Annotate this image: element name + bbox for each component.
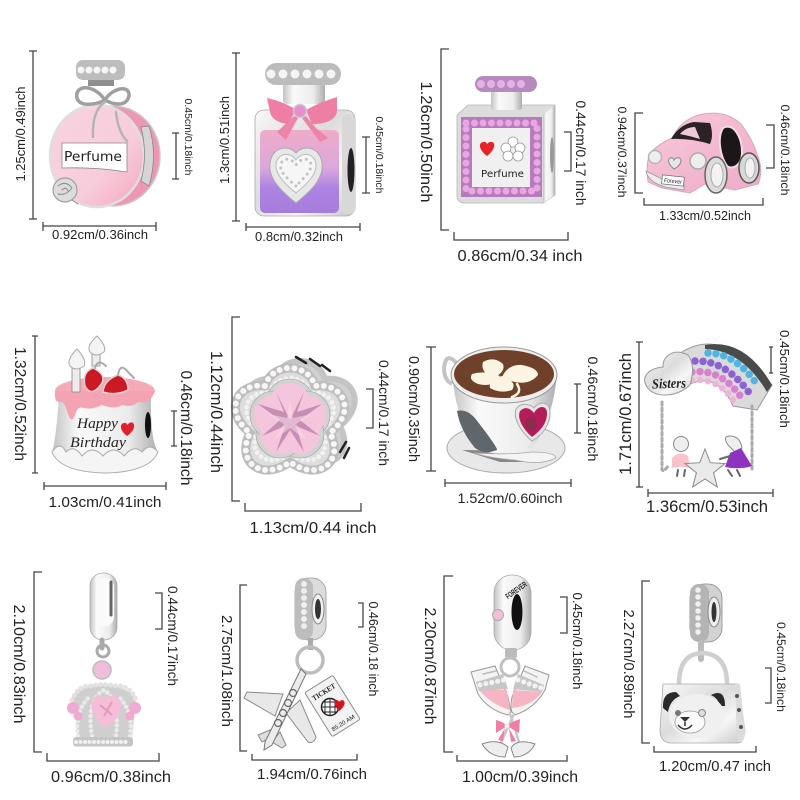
height dimension line xyxy=(29,51,37,219)
width label: 1.52cm/0.60inch xyxy=(458,490,562,506)
hole label: 0.45cm/0.18inch xyxy=(777,330,792,428)
icon: crystal flower xyxy=(235,357,355,470)
icon: toasting glasses pendant xyxy=(471,575,549,757)
width label: 1.33cm/0.52inch xyxy=(659,209,751,223)
width dimension line xyxy=(654,746,756,752)
panel: teddy bear bag charm xyxy=(620,581,788,775)
height label: 0.94cm/0.37inch xyxy=(615,106,629,198)
icon: airplane and ticket pendant: TICKET xyxy=(310,681,337,703)
panel: airplane and ticket charm xyxy=(218,578,380,783)
hole label: 0.46cm/0.18inch xyxy=(177,370,194,486)
height dimension line xyxy=(32,336,38,473)
hole label: 0.44cm/0.17 inch xyxy=(573,100,589,206)
hole dimension line xyxy=(172,133,179,179)
hole label: 0.45cm/0.18inch xyxy=(774,622,788,712)
width label: 1.13cm/0.44 inch xyxy=(250,520,376,537)
hole label: 0.44cm/0.17 inch xyxy=(376,360,392,466)
height dimension line xyxy=(240,585,247,751)
height dimension line xyxy=(232,317,240,501)
width dimension line xyxy=(43,222,156,231)
panel: crown charm xyxy=(10,572,180,786)
icon: birthday cake xyxy=(52,336,158,473)
hole dimension line xyxy=(560,597,567,633)
width label: 0.86cm/0.34 inch xyxy=(458,248,582,265)
icon: pink beetle car: Forever xyxy=(664,178,683,186)
height label: 1.32cm/0.52inch xyxy=(11,347,28,461)
hole dimension line xyxy=(358,603,363,627)
height label: 2.27cm/0.89inch xyxy=(620,610,636,718)
panel: pink car charm xyxy=(615,104,792,223)
width dimension line xyxy=(246,223,360,231)
hole label: 0.46cm/0.18 inch xyxy=(366,602,380,697)
width dimension line xyxy=(245,503,361,511)
width dimension line xyxy=(252,754,357,760)
height dimension line xyxy=(635,113,643,193)
panel: square heart perfume charm xyxy=(217,53,385,244)
hole label: 0.46cm/0.18inch xyxy=(585,356,601,462)
width label: 0.92cm/0.36inch xyxy=(52,227,148,242)
icon: airplane and ticket pendant: 85:20 AM xyxy=(331,714,356,733)
width label: 0.8cm/0.32inch xyxy=(255,229,343,244)
hole dimension line xyxy=(366,389,373,428)
icon: square perfume with pink stones: Perfume xyxy=(481,169,524,180)
hole label: 0.45cm/0.18inch xyxy=(570,592,585,690)
width label: 1.00cm/0.39inch xyxy=(462,769,578,786)
hole label: 0.45cm/0.18inch xyxy=(373,116,385,194)
panel: coffee cup charm xyxy=(405,347,601,506)
hole dimension line xyxy=(766,125,774,168)
hole dimension line xyxy=(155,593,162,629)
hole dimension line xyxy=(362,137,370,193)
width label: 1.20cm/0.47 inch xyxy=(659,759,771,775)
width dimension line xyxy=(457,755,567,761)
icon: toasting glasses pendant: FOREVER xyxy=(504,580,529,601)
height label: 0.90cm/0.35inch xyxy=(405,356,421,462)
icon: square perfume with pink stones xyxy=(457,76,555,203)
height dimension line xyxy=(34,572,42,752)
width dimension line xyxy=(44,482,166,490)
panel: pink flower charm xyxy=(207,317,392,537)
height dimension line xyxy=(636,342,643,487)
icon: bear handbag pendant xyxy=(660,584,745,743)
width dimension line xyxy=(644,198,763,205)
height label: 2.75cm/1.08inch xyxy=(218,615,235,727)
height label: 1.25cm/0.49inch xyxy=(13,86,28,182)
panel: champagne glasses charm xyxy=(421,575,585,786)
icon: rainbow with heart and chain: Sisters xyxy=(652,376,687,393)
height dimension line xyxy=(232,53,240,221)
hole dimension line xyxy=(564,132,571,171)
height label: 1.12cm/0.44inch xyxy=(207,351,225,473)
width label: 1.36cm/0.53inch xyxy=(646,498,768,516)
width label: 0.96cm/0.38inch xyxy=(51,769,171,786)
height label: 2.10cm/0.83inch xyxy=(10,604,27,724)
width dimension line xyxy=(648,489,773,497)
hole label: 0.46cm/0.18inch xyxy=(778,104,792,196)
height dimension line xyxy=(642,581,650,743)
width label: 1.03cm/0.41inch xyxy=(48,494,162,511)
hole dimension line xyxy=(769,347,773,373)
icon: round perfume bottle xyxy=(50,60,160,207)
icon: square perfume bottle with bow xyxy=(255,63,355,216)
panel: pink stone perfume charm xyxy=(417,49,589,265)
width dimension line xyxy=(445,479,571,487)
panel: round perfume bottle charm xyxy=(13,51,194,242)
panel: birthday cake charm xyxy=(11,336,194,511)
height dimension line xyxy=(441,49,449,230)
icon: pink beetle car xyxy=(646,113,761,193)
icon: crown pendant xyxy=(67,573,141,746)
width dimension line xyxy=(47,753,159,761)
height label: 1.71cm/0.67inch xyxy=(617,353,635,475)
hole label: 0.44cm/0.17inch xyxy=(165,586,180,686)
icon: airplane and ticket pendant xyxy=(244,578,360,750)
icon: birthday cake: Happy xyxy=(76,416,118,432)
hole dimension line xyxy=(171,411,177,446)
icon: round perfume bottle: Perfume xyxy=(64,150,122,165)
height label: 2.20cm/0.87inch xyxy=(421,607,438,725)
icon: rainbow with heart and chain xyxy=(645,344,772,487)
panel: sisters rainbow charm xyxy=(617,330,792,516)
width dimension line xyxy=(454,232,568,240)
height dimension line xyxy=(444,576,453,752)
hole label: 0.45cm/0.18inch xyxy=(182,98,194,176)
icon: birthday cake: Birthday xyxy=(70,435,126,451)
hole dimension line xyxy=(574,384,581,433)
height dimension line xyxy=(426,347,436,471)
height label: 1.3cm/0.51inch xyxy=(217,96,232,184)
height label: 1.26cm/0.50inch xyxy=(417,82,434,202)
width label: 1.94cm/0.76inch xyxy=(257,767,367,783)
hole dimension line xyxy=(765,668,771,703)
icon: coffee cup with saucer xyxy=(444,347,565,473)
